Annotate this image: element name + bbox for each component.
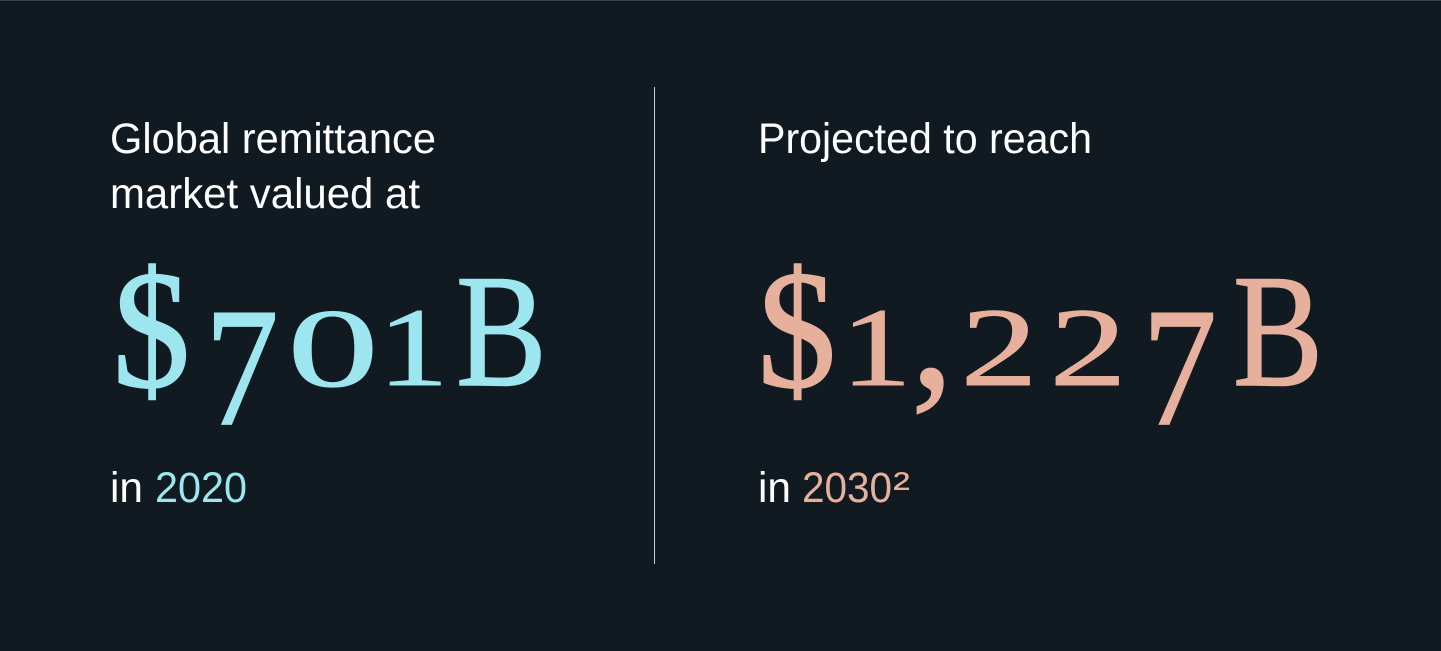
big number: $1,227B: 1	[841, 286, 911, 410]
big number: $1,227B	[758, 231, 1323, 461]
year label: in 2030 with footnote: in	[758, 464, 791, 512]
big number: $701B: $	[113, 237, 190, 424]
big number: $701B	[113, 237, 547, 461]
heading: global remittance market valued at: Global remittance	[110, 115, 436, 163]
big number: $1,227B: ,	[911, 231, 953, 425]
year label: in 2020: 2020	[155, 464, 247, 512]
big number: $1,227B: 7	[1142, 274, 1217, 461]
year label: in 2020: in	[110, 464, 143, 512]
year label: in 2030 with footnote: 2030	[802, 464, 892, 512]
year label: in 2030 with footnote	[758, 464, 910, 512]
divider	[654, 87, 655, 564]
big number: $1,227B: 2	[1050, 286, 1127, 410]
big number: $1,227B: $	[758, 237, 836, 424]
year label: in 2030 with footnote: ²	[893, 464, 910, 512]
heading: projected to reach: Projected to reach	[758, 115, 1092, 163]
big number: $701B: B	[456, 242, 547, 421]
panel: 2030 projection	[758, 115, 1323, 512]
big number: $1,227B: B	[1233, 243, 1323, 421]
panel: 2020 market value	[110, 115, 547, 512]
big number: $701B: 1	[378, 286, 448, 410]
heading: global remittance market valued at	[110, 115, 436, 218]
year label: in 2020	[110, 464, 247, 512]
big number: $701B: 7	[205, 275, 278, 461]
big number: $1,227B: 2	[961, 286, 1038, 410]
heading: global remittance market valued at: market valued at	[110, 170, 420, 218]
big number: $701B: 0	[288, 286, 378, 410]
